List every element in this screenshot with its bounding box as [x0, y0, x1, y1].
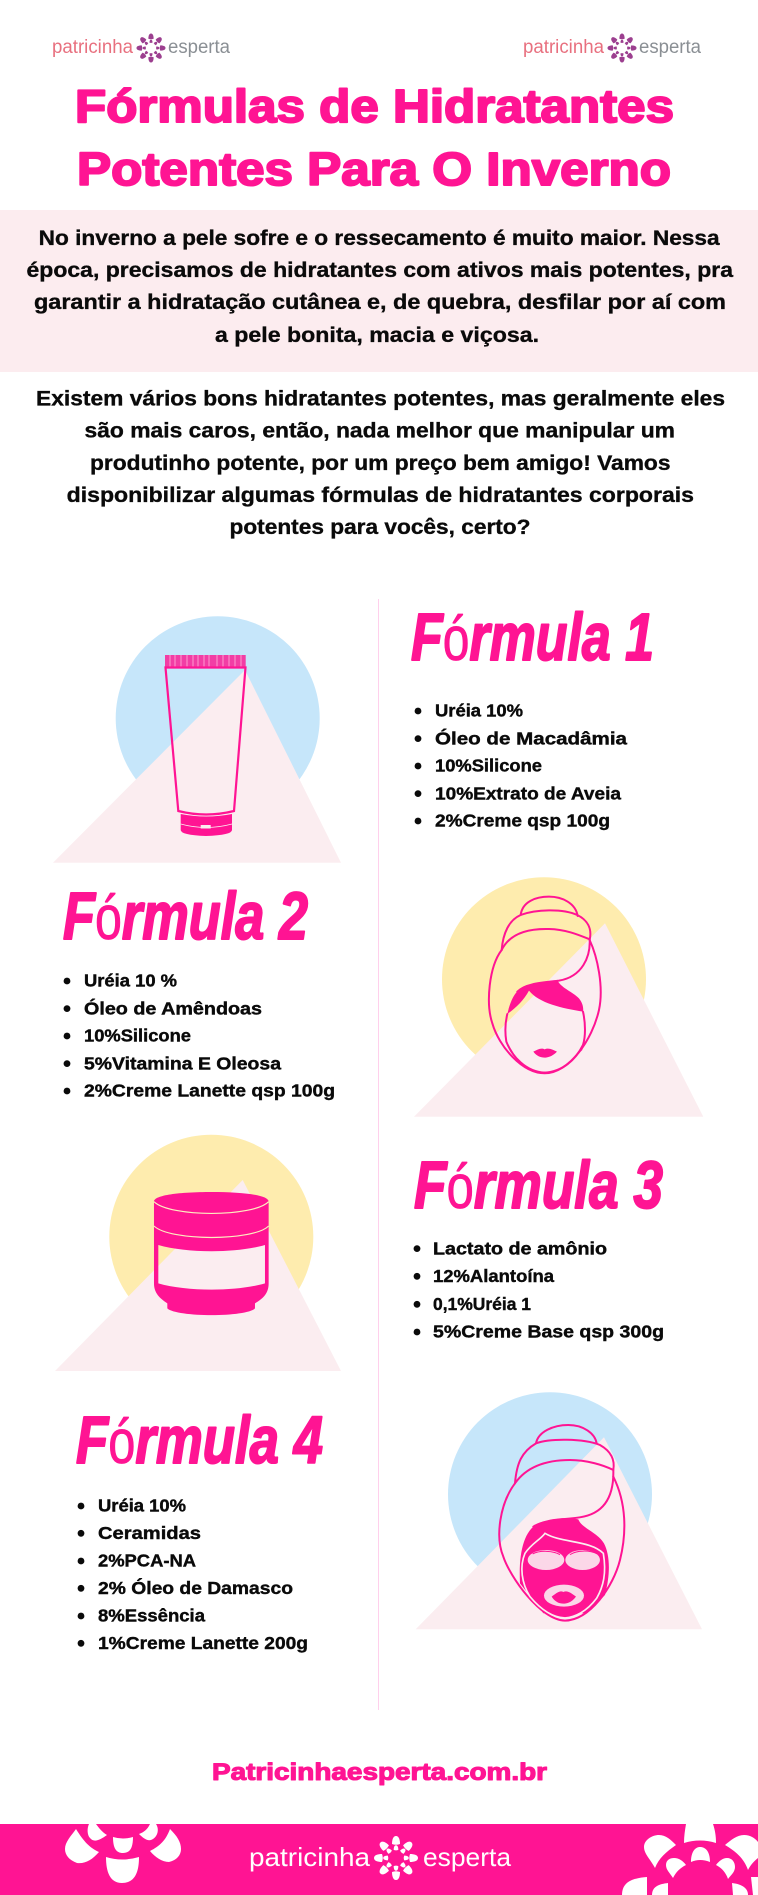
list: Fórmula 3	[414, 1238, 664, 1342]
list: Fórmula 4: 1%Creme Lanette 200g	[98, 1633, 308, 1653]
list: Fórmula 2: 2%Creme Lanette qsp 100g	[84, 1081, 335, 1101]
list: Fórmula 4	[78, 1496, 308, 1653]
illustration: tube	[53, 616, 341, 863]
list: Fórmula 2: 10%Silicone	[84, 1026, 191, 1046]
list: Fórmula 1: Uréia 10%	[435, 701, 523, 721]
illustration: cream jar	[55, 1135, 341, 1371]
heading: Fórmula 2: Fórmula 2	[63, 879, 308, 954]
logo: top right: esperta	[639, 37, 701, 58]
list: Fórmula 4: Uréia 10%	[98, 1496, 186, 1516]
text block: introduction: Existem vários bons hidratantes potentes, mas geralmente eles	[36, 388, 725, 411]
text block: introduction	[36, 388, 725, 539]
list: Fórmula 3: Lactato de amônio	[433, 1238, 607, 1258]
heading: Fórmula 4: Fórmula 4	[76, 1403, 323, 1478]
text block: introduction: potentes para vocês, certo?	[230, 516, 530, 539]
logo: footer: patricinha	[249, 1842, 371, 1872]
panel: intro band	[0, 210, 758, 372]
title: Fórmulas de Hidratantes	[75, 80, 674, 132]
list: Fórmula 3: 12%Alantoína	[433, 1266, 554, 1286]
illustration: woman with face mask	[416, 1392, 702, 1629]
logo: top left	[52, 33, 230, 63]
logo: footer	[249, 1836, 512, 1880]
text block: introduction: disponibilizar algumas fórmulas de hidratantes corporais	[67, 484, 694, 507]
panel: intro band: No inverno a pele sofre e o ressecamento é muito maior. Nessa	[39, 227, 720, 250]
text block: introduction: são mais caros, então, nada melhor que manipular um	[84, 420, 675, 443]
list: Fórmula 3: 5%Creme Base qsp 300g	[433, 1322, 664, 1342]
decorative flower: left	[65, 1824, 181, 1883]
footer band	[0, 1824, 758, 1895]
list: Fórmula 4: 2% Óleo de Damasco	[98, 1577, 293, 1598]
list: Fórmula 3: 0,1%Uréia 1	[433, 1294, 531, 1314]
panel: intro band: época, precisamos de hidratantes com ativos mais potentes, pra	[26, 259, 733, 282]
logo: top left: patricinha	[52, 37, 133, 58]
heading: Fórmula 1: Fórmula 1	[411, 600, 654, 675]
illustration: woman with hair bun	[414, 877, 703, 1117]
list: Fórmula 4: Ceramidas	[98, 1523, 201, 1543]
list: Fórmula 2: 5%Vitamina E Oleosa	[84, 1053, 281, 1073]
list: Fórmula 2: Uréia 10 %	[84, 971, 177, 991]
list: Fórmula 1: 10%Silicone	[435, 756, 542, 776]
list: Fórmula 2	[64, 971, 335, 1101]
panel: intro band: garantir a hidratação cutânea e, de quebra, desfilar por aí com	[34, 291, 726, 314]
text block: introduction: produtinho potente, por um preço bem amigo! Vamos	[90, 452, 670, 475]
list: Fórmula 2: Óleo de Amêndoas	[84, 997, 262, 1018]
heading: Fórmula 3: Fórmula 3	[414, 1148, 663, 1223]
logo: top left: esperta	[168, 37, 230, 58]
panel: intro band: a pele bonita, macia e viçosa.	[215, 324, 539, 347]
list: Fórmula 1: 10%Extrato de Aveia	[435, 783, 621, 803]
list: Fórmula 4: 2%PCA-NA	[98, 1551, 196, 1571]
logo: top right: patricinha	[523, 37, 604, 58]
decorative flower: right	[622, 1824, 758, 1895]
logo: footer: esperta	[423, 1842, 512, 1872]
list: Fórmula 4: 8%Essência	[98, 1606, 205, 1626]
title: Potentes Para O Inverno	[77, 143, 671, 195]
list: Fórmula 1: 2%Creme qsp 100g	[435, 811, 610, 831]
logo: top right	[523, 33, 701, 63]
list: Fórmula 1	[415, 701, 627, 831]
website link: Patricinhaesperta.com.br	[212, 1759, 547, 1786]
list: Fórmula 1: Óleo de Macadâmia	[435, 727, 627, 748]
title	[75, 80, 674, 195]
